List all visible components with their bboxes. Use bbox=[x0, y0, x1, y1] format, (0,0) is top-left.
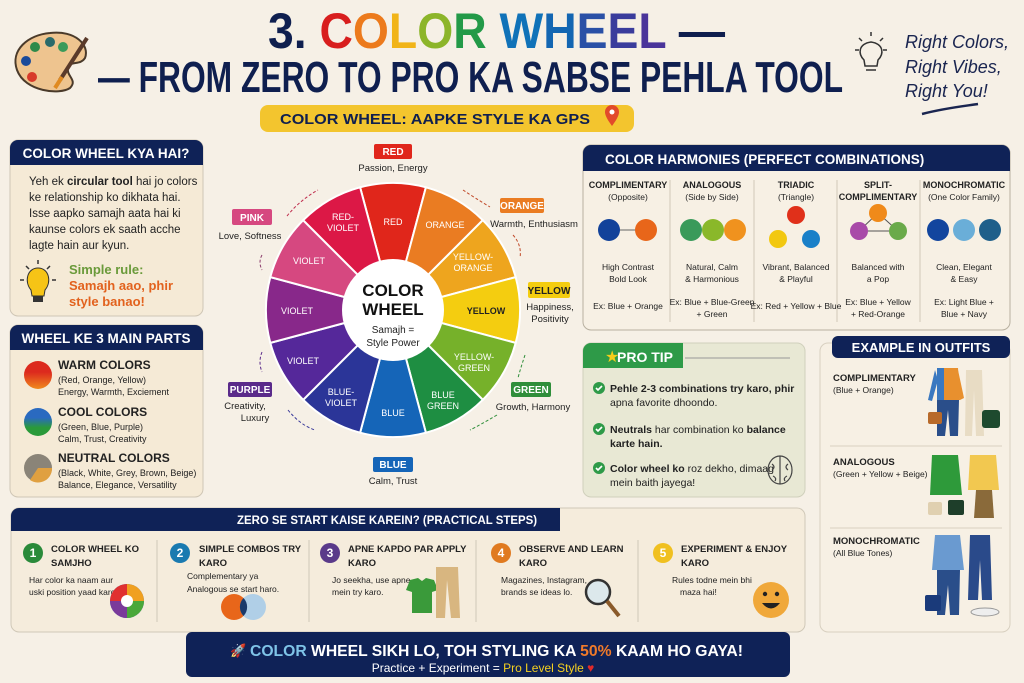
panel: wheel ke 3 main parts: (Green, Blue, Purple) bbox=[58, 422, 143, 432]
panel: pro tip bbox=[583, 343, 805, 497]
panel: color harmonies: TRIADIC bbox=[778, 180, 815, 190]
chart: color wheel: GREEN bbox=[458, 363, 490, 373]
panel: color wheel kya hai: ke relationship ko dikhata hai. bbox=[29, 192, 181, 204]
panel: practical steps: 4 bbox=[498, 546, 505, 560]
wheel labels: Creativity, bbox=[224, 401, 266, 412]
panel: color harmonies: a Pop bbox=[867, 274, 889, 284]
panel: wheel ke 3 main parts: (Red, Orange, Yellow) bbox=[58, 375, 146, 385]
panel: practical steps: 1 bbox=[30, 546, 37, 560]
panel: practical steps: 2 bbox=[177, 546, 184, 560]
panel: color harmonies: Ex: Light Blue + bbox=[934, 297, 994, 307]
wheel labels: Passion, Energy bbox=[358, 163, 428, 174]
panel: practical steps: Complementary ya bbox=[187, 571, 259, 581]
panel: color harmonies: Ex: Blue + Blue-Green bbox=[670, 297, 755, 307]
chart: color wheel: YELLOW- bbox=[454, 352, 494, 362]
wheel labels: ORANGE bbox=[500, 201, 544, 212]
panel: color harmonies: Vibrant, Balanced bbox=[763, 262, 830, 272]
banner: bottom message bbox=[186, 632, 790, 677]
panel: wheel ke 3 main parts: COOL COLORS bbox=[58, 405, 147, 419]
panel: practical steps: 5 bbox=[660, 546, 667, 560]
chart: color wheel: COLOR bbox=[362, 281, 424, 300]
panel: color harmonies: + Red-Orange bbox=[851, 309, 905, 319]
panel: practical steps: Analogous se start haro. bbox=[187, 584, 279, 594]
panel: color harmonies: Natural, Calm bbox=[686, 262, 738, 272]
panel: practical steps: OBSERVE AND LEARN bbox=[519, 544, 624, 555]
panel: pro tip: ★ bbox=[605, 349, 619, 366]
panel: example in outfits: EXAMPLE IN OUTFITS bbox=[852, 340, 991, 355]
panel: practical steps: Magazines, Instagram, bbox=[501, 575, 587, 585]
panel: pro tip: PRO TIP bbox=[617, 349, 673, 365]
panel: example in outfits: COMPLIMENTARY bbox=[833, 373, 917, 384]
panel: practical steps: KARO bbox=[681, 558, 709, 569]
chart: color wheel: Style Power bbox=[366, 338, 420, 349]
chart: color wheel: GREEN bbox=[427, 401, 459, 411]
panel: color wheel kya hai: Isse aapko samajh aata hai ki bbox=[29, 208, 181, 220]
wheel labels bbox=[219, 144, 578, 487]
panel: color harmonies: (Side by Side) bbox=[685, 192, 739, 202]
panel: practical steps bbox=[11, 508, 805, 632]
panel: color harmonies: Bold Look bbox=[609, 274, 648, 284]
icon: paint palette bbox=[15, 33, 87, 91]
panel: example in outfits: ANALOGOUS bbox=[833, 457, 895, 468]
banner: bottom message: 🚀 bbox=[230, 643, 246, 658]
icon: venn circles bbox=[221, 594, 266, 620]
panel: color wheel kya hai: COLOR WHEEL KYA HAI? bbox=[23, 146, 189, 161]
panel: color harmonies: High Contrast bbox=[602, 262, 655, 272]
panel: practical steps: EXPERIMENT & ENJOY bbox=[681, 544, 788, 555]
panel: practical steps: maza hai! bbox=[680, 587, 717, 597]
panel: example in outfits: MONOCHROMATIC bbox=[833, 536, 920, 547]
wheel labels: Growth, Harmony bbox=[496, 402, 570, 413]
panel: wheel ke 3 main parts: (Black, White, Grey, Brown, Beige) bbox=[58, 468, 196, 478]
wheel labels: Positivity bbox=[531, 314, 569, 325]
chart: color wheel: ORANGE bbox=[453, 263, 493, 273]
tagline: Right Colors, bbox=[905, 32, 1009, 52]
chart: color wheel: YELLOW bbox=[467, 306, 506, 316]
chart: color wheel: VIOLET bbox=[325, 398, 358, 408]
panel: wheel ke 3 main parts bbox=[10, 325, 203, 497]
panel: wheel ke 3 main parts: Balance, Elegance, Versatility bbox=[58, 480, 177, 490]
chart: color wheel: Samajh = bbox=[372, 325, 414, 336]
panel: color harmonies: MONOCHROMATIC bbox=[923, 180, 1006, 190]
panel: color harmonies: Balanced with bbox=[852, 262, 905, 272]
icon: bulb bbox=[20, 260, 56, 302]
panel: practical steps: SIMPLE COMBOS TRY bbox=[199, 544, 302, 555]
chart: color wheel: VIOLET bbox=[281, 306, 314, 316]
tagline: Right Vibes, bbox=[905, 57, 1002, 77]
title bbox=[98, 3, 843, 102]
subtitle pill: COLOR WHEEL: AAPKE STYLE KA GPS bbox=[280, 111, 590, 128]
panel: practical steps: KARO bbox=[519, 558, 547, 569]
panel: wheel ke 3 main parts: NEUTRAL COLORS bbox=[58, 451, 170, 465]
icon: magnifier bbox=[586, 580, 619, 616]
panel: color wheel kya hai: style banao! bbox=[69, 294, 145, 309]
panel: wheel ke 3 main parts: WARM COLORS bbox=[58, 358, 151, 372]
panel: practical steps: uski position yaad karo. bbox=[29, 587, 118, 597]
panel: pro tip: Neutrals har combination ko balance bbox=[610, 424, 786, 436]
panel: color wheel kya hai: kaunse colors ek saath acche bbox=[29, 224, 181, 236]
chart: color wheel: BLUE bbox=[381, 408, 405, 418]
wheel labels: Love, Softness bbox=[219, 231, 282, 242]
panel: practical steps: mein try karo. bbox=[332, 587, 384, 597]
panel: color harmonies: COLOR HARMONIES (PERFECT COMBINATIONS) bbox=[605, 152, 924, 167]
panel: pro tip: karte hain. bbox=[610, 438, 663, 450]
panel: pro tip: Color wheel ko roz dekho, dimaag bbox=[610, 463, 774, 475]
chart: color wheel: BLUE- bbox=[328, 387, 354, 397]
panel: wheel ke 3 main parts: WHEEL KE 3 MAIN PARTS bbox=[21, 331, 191, 346]
title: 3. COLOR WHEEL — bbox=[268, 3, 725, 59]
panel: pro tip: apna favorite dhoondo. bbox=[610, 397, 717, 409]
icon: mini wheel bbox=[110, 584, 144, 618]
panel: practical steps: brands se ideas lo. bbox=[501, 587, 572, 597]
panel: color wheel kya hai: Simple rule: bbox=[69, 262, 143, 277]
panel: color wheel kya hai: lagte hain aur kyun. bbox=[29, 240, 129, 252]
panel: practical steps: Jo seekha, use apne bbox=[332, 575, 411, 585]
panel: color harmonies: Ex: Blue + Yellow bbox=[845, 297, 912, 307]
panel: color wheel kya hai: Samajh aao, phir bbox=[69, 278, 173, 293]
panel: wheel ke 3 main parts: Calm, Trust, Creativity bbox=[58, 434, 147, 444]
panel: practical steps: Har color ka naam aur bbox=[29, 575, 113, 585]
panel: practical steps: KARO bbox=[199, 558, 227, 569]
wheel labels: Calm, Trust bbox=[369, 476, 418, 487]
panel: practical steps: 3 bbox=[327, 546, 334, 560]
panel: pro tip: mein baith jayega! bbox=[610, 477, 695, 489]
panel: practical steps: ZERO SE START KAISE KAREIN? (PRACTICAL STEPS) bbox=[237, 513, 537, 527]
panel: pro tip: Pehle 2-3 combinations try karo, phir bbox=[610, 383, 794, 395]
chart: color wheel: YELLOW- bbox=[453, 252, 493, 262]
icon: lightbulb bbox=[855, 32, 887, 70]
panel: color wheel kya hai bbox=[10, 140, 203, 316]
chart: color wheel bbox=[266, 183, 520, 437]
wheel labels: GREEN bbox=[513, 385, 549, 396]
chart: color wheel: VIOLET bbox=[293, 256, 326, 266]
chart: color wheel: WHEEL bbox=[362, 300, 424, 319]
panel: color harmonies: COMPLIMENTARY bbox=[839, 192, 917, 202]
panel: wheel ke 3 main parts: Energy, Warmth, Exciement bbox=[58, 387, 170, 397]
wheel labels: BLUE bbox=[379, 460, 407, 471]
panel: example in outfits: (All Blue Tones) bbox=[833, 548, 893, 558]
panel: example in outfits: (Green + Yellow + Beige) bbox=[833, 469, 928, 479]
banner: bottom message: COLOR WHEEL SIKH LO, TOH STYLING KA 50% KAAM HO GAYA! bbox=[250, 643, 743, 660]
subtitle pill bbox=[260, 105, 634, 132]
outfit: analogous bbox=[928, 455, 999, 518]
panel: color harmonies: Ex: Red + Yellow + Blue bbox=[751, 301, 842, 311]
panel: practical steps: KARO bbox=[348, 558, 376, 569]
panel: color harmonies: Clean, Elegant bbox=[936, 262, 993, 272]
outfit: complimentary bbox=[928, 368, 1000, 436]
panel: example in outfits: (Blue + Orange) bbox=[833, 385, 894, 395]
panel: color harmonies: + Green bbox=[697, 309, 728, 319]
wheel labels: PURPLE bbox=[230, 385, 271, 396]
panel: color harmonies: & Easy bbox=[951, 274, 978, 284]
panel: practical steps: COLOR WHEEL KO bbox=[51, 544, 139, 555]
wheel labels: YELLOW bbox=[528, 286, 571, 297]
wheel labels: RED bbox=[382, 147, 404, 158]
panel: color harmonies: (One Color Family) bbox=[928, 192, 1000, 202]
wheel labels: Happiness, bbox=[526, 302, 574, 313]
icon: t-shirt and pants bbox=[406, 567, 460, 618]
wheel labels: PINK bbox=[240, 213, 265, 224]
tagline bbox=[905, 32, 1009, 114]
panel: color harmonies: ANALOGOUS bbox=[683, 180, 741, 190]
chart: color wheel: ORANGE bbox=[425, 220, 465, 230]
chart: color wheel: BLUE bbox=[431, 390, 455, 400]
panel: color harmonies: COMPLIMENTARY bbox=[589, 180, 667, 190]
panel: practical steps: Rules todne mein bhi bbox=[672, 575, 752, 585]
panel: color harmonies: SPLIT- bbox=[864, 180, 892, 190]
banner: bottom message: Practice + Experiment = Pro Level Style ♥ bbox=[372, 661, 594, 675]
panel: color harmonies: & Harmonious bbox=[685, 274, 739, 284]
icon: smiley bbox=[753, 582, 789, 618]
panel: example in outfits bbox=[820, 336, 1010, 632]
panel: color wheel kya hai: Yeh ek circular tool hai jo colors bbox=[29, 176, 198, 188]
panel: color harmonies bbox=[583, 145, 1010, 330]
panel: color harmonies: (Triangle) bbox=[778, 192, 814, 202]
panel: practical steps: APNE KAPDO PAR APPLY bbox=[348, 544, 467, 555]
chart: color wheel: VIOLET bbox=[287, 356, 320, 366]
outfit: monochromatic bbox=[925, 535, 999, 616]
wheel labels: Luxury bbox=[241, 413, 270, 424]
panel: color harmonies: (Opposite) bbox=[608, 192, 648, 202]
panel: color harmonies: Blue + Navy bbox=[941, 309, 988, 319]
panel: color harmonies: & Playful bbox=[779, 274, 813, 284]
panel: color harmonies: Ex: Blue + Orange bbox=[593, 301, 663, 311]
wheel labels: Warmth, Enthusiasm bbox=[490, 219, 578, 230]
panel: practical steps: SAMJHO bbox=[51, 558, 92, 569]
chart: color wheel: RED bbox=[383, 217, 403, 227]
chart: color wheel: RED- bbox=[332, 212, 354, 222]
chart: color wheel: VIOLET bbox=[327, 223, 360, 233]
tagline: Right You! bbox=[905, 81, 988, 101]
icon: brain bbox=[768, 456, 792, 484]
